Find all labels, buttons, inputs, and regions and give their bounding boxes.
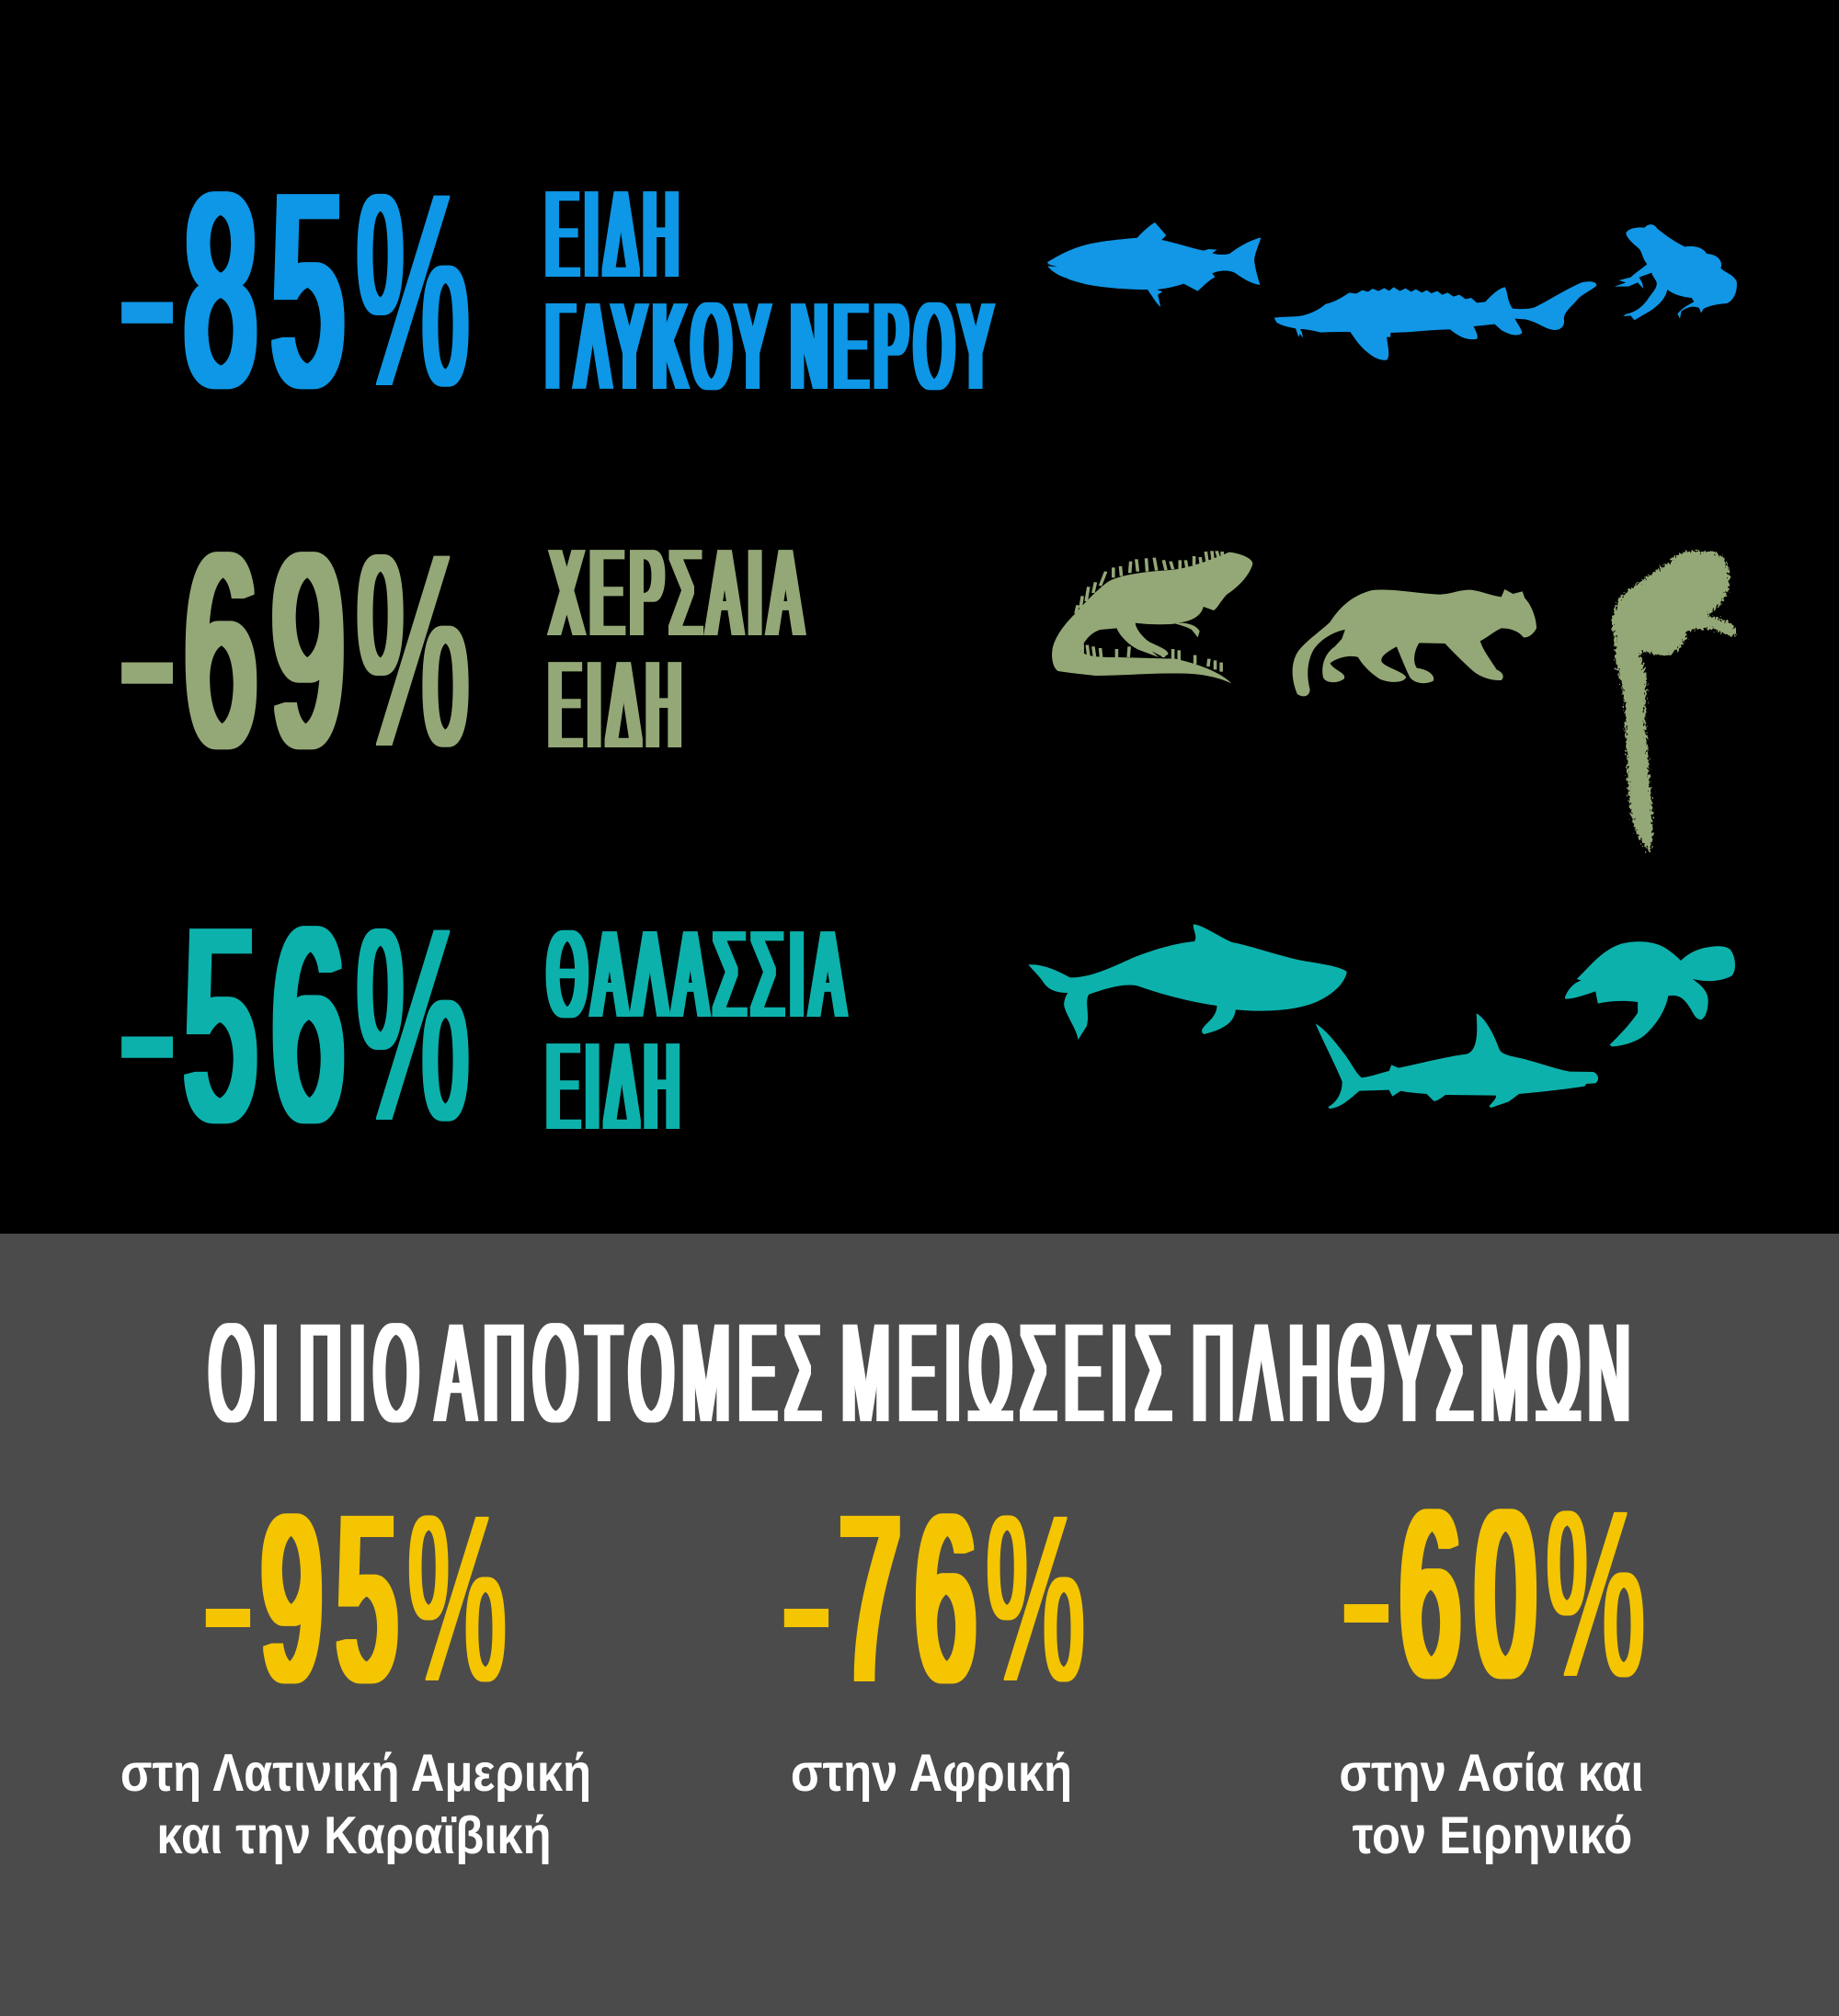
icon: iguana silhouette bbox=[1052, 551, 1252, 683]
stat: Latin America -95% bbox=[198, 1467, 508, 1731]
stat: freshwater -85%: % bbox=[356, 137, 471, 442]
caption: Latin America and the Caribbean: και την Καραϊβική bbox=[156, 1805, 552, 1865]
caption: Latin America and the Caribbean bbox=[120, 1743, 591, 1865]
stat: Asia Pacific -60%: - bbox=[1336, 1464, 1397, 1726]
label: freshwater species bbox=[546, 165, 999, 416]
label: terrestrial species: ΕΙΔΗ bbox=[549, 635, 688, 774]
icon: sturgeon silhouette bbox=[1274, 281, 1596, 360]
stat: freshwater -85%: 8 bbox=[185, 137, 257, 442]
text: ΧΕΡΣΑΙΑ bbox=[550, 523, 809, 662]
stat: Africa -76%: 7 bbox=[840, 1467, 900, 1730]
caption: Asia and the Pacific bbox=[1339, 1743, 1644, 1865]
stat: freshwater -85% bbox=[112, 137, 471, 443]
icon: whale silhouette bbox=[1028, 924, 1347, 1040]
stat: Latin America -95%: - bbox=[198, 1468, 258, 1731]
label: terrestrial species bbox=[549, 523, 809, 774]
icon: wild cat silhouette bbox=[1293, 589, 1536, 696]
stat: Africa -76%: - bbox=[776, 1468, 837, 1731]
stat: terrestrial -69%: 6 bbox=[185, 497, 257, 803]
stat: terrestrial -69%: 9 bbox=[272, 497, 344, 803]
stat: Asia Pacific -60%: 6 bbox=[1400, 1463, 1460, 1726]
stat: Africa -76% bbox=[776, 1467, 1086, 1731]
icon: sea turtle silhouette bbox=[1565, 941, 1735, 1046]
stat: freshwater -85%: 5 bbox=[272, 137, 344, 442]
stat: Asia Pacific -60%: 0 bbox=[1476, 1463, 1536, 1726]
stat: Latin America -95%: 9 bbox=[262, 1467, 322, 1730]
stat: marine -56%: % bbox=[356, 871, 471, 1177]
caption: Latin America and the Caribbean: στη Λατινική Αμερική bbox=[120, 1743, 591, 1803]
stat: Africa -76%: 6 bbox=[916, 1467, 976, 1730]
caption: Africa: στην Αφρική bbox=[791, 1743, 1072, 1803]
stat: terrestrial -69%: % bbox=[356, 497, 471, 803]
text: ΓΛΥΚΟΥ ΝΕΡΟΥ bbox=[546, 277, 999, 416]
stat: marine -56%: - bbox=[112, 872, 182, 1178]
stat: terrestrial -69% bbox=[112, 497, 471, 803]
icon: hammerhead shark silhouette bbox=[1316, 1013, 1598, 1109]
stat: Latin America -95%: % bbox=[407, 1467, 508, 1730]
label: marine species bbox=[547, 905, 851, 1156]
panel: grey lower band bbox=[0, 1234, 1839, 2016]
stat: terrestrial -69%: - bbox=[112, 498, 182, 803]
stat: Asia Pacific -60%: % bbox=[1546, 1463, 1646, 1726]
stat: Asia Pacific -60% bbox=[1336, 1463, 1646, 1726]
stat: marine -56%: 6 bbox=[272, 871, 344, 1177]
icon: salmon silhouette bbox=[1047, 222, 1261, 307]
caption: Asia and the Pacific: στην Ασία και bbox=[1339, 1743, 1644, 1803]
label: freshwater species: ΕΙΔΗ bbox=[546, 165, 685, 303]
stat: marine -56% bbox=[112, 871, 471, 1178]
stat: Africa -76%: % bbox=[986, 1467, 1086, 1730]
label: marine species: ΕΙΔΗ bbox=[547, 1017, 686, 1156]
icon: monkey silhouette bbox=[1614, 552, 1735, 850]
text: ΘΑΛΑΣΣΙΑ bbox=[548, 905, 851, 1043]
stat: Latin America -95%: 5 bbox=[337, 1467, 397, 1730]
icon: frog silhouette bbox=[1615, 224, 1737, 320]
stat: freshwater -85%: - bbox=[112, 138, 182, 443]
stat: marine -56%: 5 bbox=[185, 871, 257, 1177]
caption: Asia and the Pacific: τον Ειρηνικό bbox=[1353, 1805, 1632, 1865]
